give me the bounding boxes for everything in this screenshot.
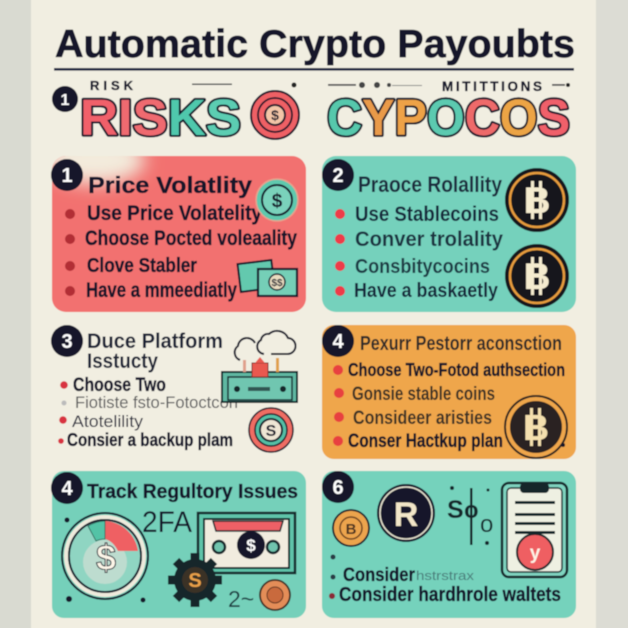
bullet list: Atotelility <box>72 412 144 431</box>
panel: stablecoins mitigation <box>322 156 576 312</box>
icon: banknote <box>198 513 295 573</box>
icon: gear with dollar: S <box>188 570 202 592</box>
icon: orange coin <box>260 580 290 610</box>
panel: platform security risk <box>51 325 297 452</box>
badge: 4 <box>51 472 83 504</box>
badge: 1 <box>51 159 83 191</box>
heading: CYPOCOS: CYPOCOS <box>327 89 570 146</box>
icon: gauge with dollar <box>62 513 148 602</box>
icon: bitcoin <box>377 484 435 542</box>
panel: hardware wallets mitigation <box>322 471 576 618</box>
icon: phone wallet: y <box>530 543 541 564</box>
panel: regulatory issues risk <box>51 471 306 618</box>
label: 2FA: 2FA <box>142 506 192 539</box>
bullet list: Use Stablecoins <box>355 203 499 226</box>
badge: 2: 2 <box>332 165 344 187</box>
section header: mitigations <box>327 79 570 146</box>
heading: RISKS: RISKS <box>80 89 241 146</box>
bullet list: Conser Hactkup plan <box>348 431 503 452</box>
badge: 1: 1 <box>61 165 73 187</box>
panel: price volatility risk <box>50 156 306 312</box>
panel heading: Praoce Rolallity <box>358 172 503 197</box>
bullet list: Consider hardhrole waltets <box>339 584 561 606</box>
bullet list: Gonsie stable coins <box>352 384 495 405</box>
bullet list: Use Price Volatelity <box>87 202 262 225</box>
icon: bitcoin: B <box>523 407 549 448</box>
section header: mitigations: MITITTIONS <box>442 79 542 94</box>
panel heading: Price Volatlity <box>88 172 252 198</box>
badge: 6 <box>322 471 354 503</box>
bullet list: Consider <box>343 565 416 586</box>
badge: 1: 1 <box>61 92 70 109</box>
icon: bitcoin top: B <box>524 180 550 221</box>
icon: bitcoin bottom <box>505 244 569 308</box>
icon: phone wallet <box>502 483 567 577</box>
badge: 4: 4 <box>61 478 73 500</box>
icon: orange coin <box>333 510 369 546</box>
icon: gear with dollar <box>168 553 222 607</box>
icon: gauge with dollar: $ <box>96 537 116 578</box>
badge: 4: 4 <box>332 331 344 353</box>
bullet list <box>58 375 238 450</box>
bullet list: Choose Pocted voleaality <box>85 227 297 250</box>
bullet list <box>329 554 561 606</box>
bullet list: Conver trolality <box>355 228 503 251</box>
icon: percent symbols: o <box>464 497 479 524</box>
bullet list: Choose Two <box>73 375 166 396</box>
icon: target coin: S <box>266 423 277 440</box>
bullet list: Have a baskaetly <box>354 280 499 302</box>
bullet list <box>333 359 565 452</box>
bullet list: Clove Stabler <box>87 255 197 277</box>
bullet list: Fiotiste fsto-Fotoctcon <box>75 393 238 412</box>
icon: teal coin <box>256 179 298 221</box>
bullet list: Have a mmeediatly <box>86 279 237 302</box>
panel heading: Pexurr Pestorr aconsction <box>360 333 562 355</box>
icon: percent symbols: o <box>480 511 493 538</box>
badge: 4 <box>322 325 354 357</box>
panel heading: Isstucty <box>87 350 158 373</box>
bullet list: hstrstrax <box>416 568 475 583</box>
bullet list: Consier a backup plam <box>67 430 233 450</box>
panel heading: Duce Platform <box>87 330 223 353</box>
icon: bitcoin <box>505 396 567 458</box>
badge: 3 <box>51 325 83 357</box>
badge: 6: 6 <box>332 477 344 499</box>
bullet list <box>65 202 297 302</box>
bullet list: Choose Two-Fotod authsection <box>348 359 565 380</box>
section header: risks <box>52 78 299 146</box>
icon: percent symbols <box>447 486 493 545</box>
icon: dollar target coin: $ <box>271 107 279 123</box>
badge: 1 <box>52 86 78 112</box>
badge: 3: 3 <box>61 331 73 353</box>
title: Automatic Crypto Payoubts <box>55 23 575 66</box>
label: 2: 2~ <box>228 586 254 612</box>
badge: 2 <box>322 159 354 191</box>
panel heading: Track Regultory Issues <box>87 481 298 503</box>
icon: cloud platform banknote <box>222 331 297 402</box>
icon: orange coin: B <box>346 521 357 538</box>
bullet list: Consbitycocins <box>355 256 490 278</box>
panel: two-factor authentication mitigation <box>322 325 576 459</box>
icon: banknotes: $$ <box>271 278 283 289</box>
icon: banknote: $ <box>246 536 256 555</box>
icon: teal coin: $ <box>272 191 283 212</box>
icon: banknotes <box>238 260 297 296</box>
icon: target coin <box>249 408 293 452</box>
icon: bitcoin bottom: B <box>524 256 550 297</box>
icon: percent symbols: S <box>447 496 464 524</box>
bullet list <box>335 203 503 302</box>
section header: risks: RISK <box>90 78 134 93</box>
bullet list: Consideer aristies <box>353 408 492 429</box>
icon: bitcoin top <box>505 168 569 232</box>
icon: bitcoin: R <box>394 496 418 534</box>
icon: dollar target coin <box>251 91 299 139</box>
